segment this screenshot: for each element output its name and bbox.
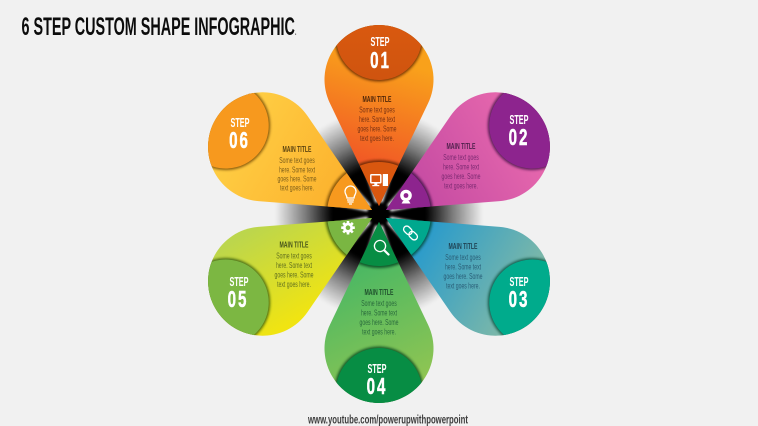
- main title 05: MAIN TITLE: [280, 240, 309, 250]
- body text 06: here. Some text: [279, 167, 315, 175]
- body text 05: Some text goes: [276, 253, 312, 261]
- step label 02: STEP: [510, 113, 528, 127]
- panel: step 03: [386, 218, 550, 336]
- step number 05: 05: [228, 287, 248, 313]
- body text 04: Some text goes: [361, 300, 397, 308]
- body text 06: text goes here.: [280, 185, 314, 193]
- body text 01: here. Some text: [359, 116, 395, 124]
- petal shape 04: [324, 222, 434, 403]
- body text 06: Some text goes: [279, 157, 315, 165]
- body text 01: Some text goes: [359, 107, 395, 115]
- step number 02: 02: [509, 125, 529, 151]
- body text 02: Some text goes: [443, 154, 479, 162]
- main title 04: MAIN TITLE: [364, 288, 394, 297]
- petal shape 02: [386, 92, 550, 210]
- step label 05: STEP: [230, 275, 248, 289]
- body text 04: goes here. Some: [360, 319, 399, 327]
- step number 04: 04: [367, 374, 387, 400]
- step label 03: STEP: [510, 275, 528, 289]
- body text 04: text goes here.: [362, 329, 396, 337]
- body text 01: text goes here.: [360, 135, 394, 143]
- black shadow rays between petals: [275, 113, 483, 315]
- body text 06: goes here. Some: [278, 176, 317, 184]
- main title 02: MAIN TITLE: [446, 142, 476, 151]
- panel: step 01: [324, 25, 434, 206]
- step label 04: STEP: [368, 362, 386, 376]
- icon: computer: [371, 174, 388, 186]
- body text 01: goes here. Some: [358, 126, 397, 134]
- icon: webcam: [400, 190, 412, 204]
- panel: step 02: [386, 92, 550, 210]
- petal shape 03: [386, 218, 550, 336]
- petal shape 06: [208, 92, 372, 210]
- body text 02: here. Some text: [443, 164, 479, 172]
- icon: chain link: [402, 225, 419, 241]
- body text 03: Some text goes: [445, 254, 481, 262]
- step number 01: 01: [370, 48, 391, 74]
- body text 04: here. Some text: [361, 310, 397, 318]
- step number 03: 03: [509, 287, 529, 313]
- main title 01: MAIN TITLE: [362, 95, 392, 104]
- body text 05: here. Some text: [276, 262, 312, 270]
- petal shape 01: [324, 25, 434, 206]
- body text 03: here. Some text: [445, 264, 481, 272]
- main title 06: MAIN TITLE: [282, 145, 312, 154]
- panel: step 06: [208, 92, 372, 210]
- petal shape 05: [208, 218, 372, 336]
- body text 02: text goes here.: [444, 183, 478, 191]
- main title 03: MAIN TITLE: [448, 242, 478, 251]
- body text 03: text goes here.: [446, 283, 480, 291]
- panel: step 04: [324, 222, 434, 403]
- step label 01: STEP: [370, 35, 390, 49]
- body text 05: goes here. Some: [275, 272, 314, 280]
- icon: gear: [341, 221, 355, 234]
- icon: light bulb: [345, 186, 356, 204]
- body text 02: goes here. Some: [442, 173, 481, 181]
- icon: magnifier: [374, 240, 388, 254]
- panel: step 05: [208, 218, 372, 336]
- step number 06: 06: [229, 128, 250, 154]
- step label 06: STEP: [230, 116, 250, 130]
- body text 03: goes here. Some: [444, 273, 483, 281]
- body text 05: text goes here.: [277, 281, 311, 289]
- title: 6 STEP CUSTOM SHAPE INFOGRAPHIC.: [22, 13, 297, 41]
